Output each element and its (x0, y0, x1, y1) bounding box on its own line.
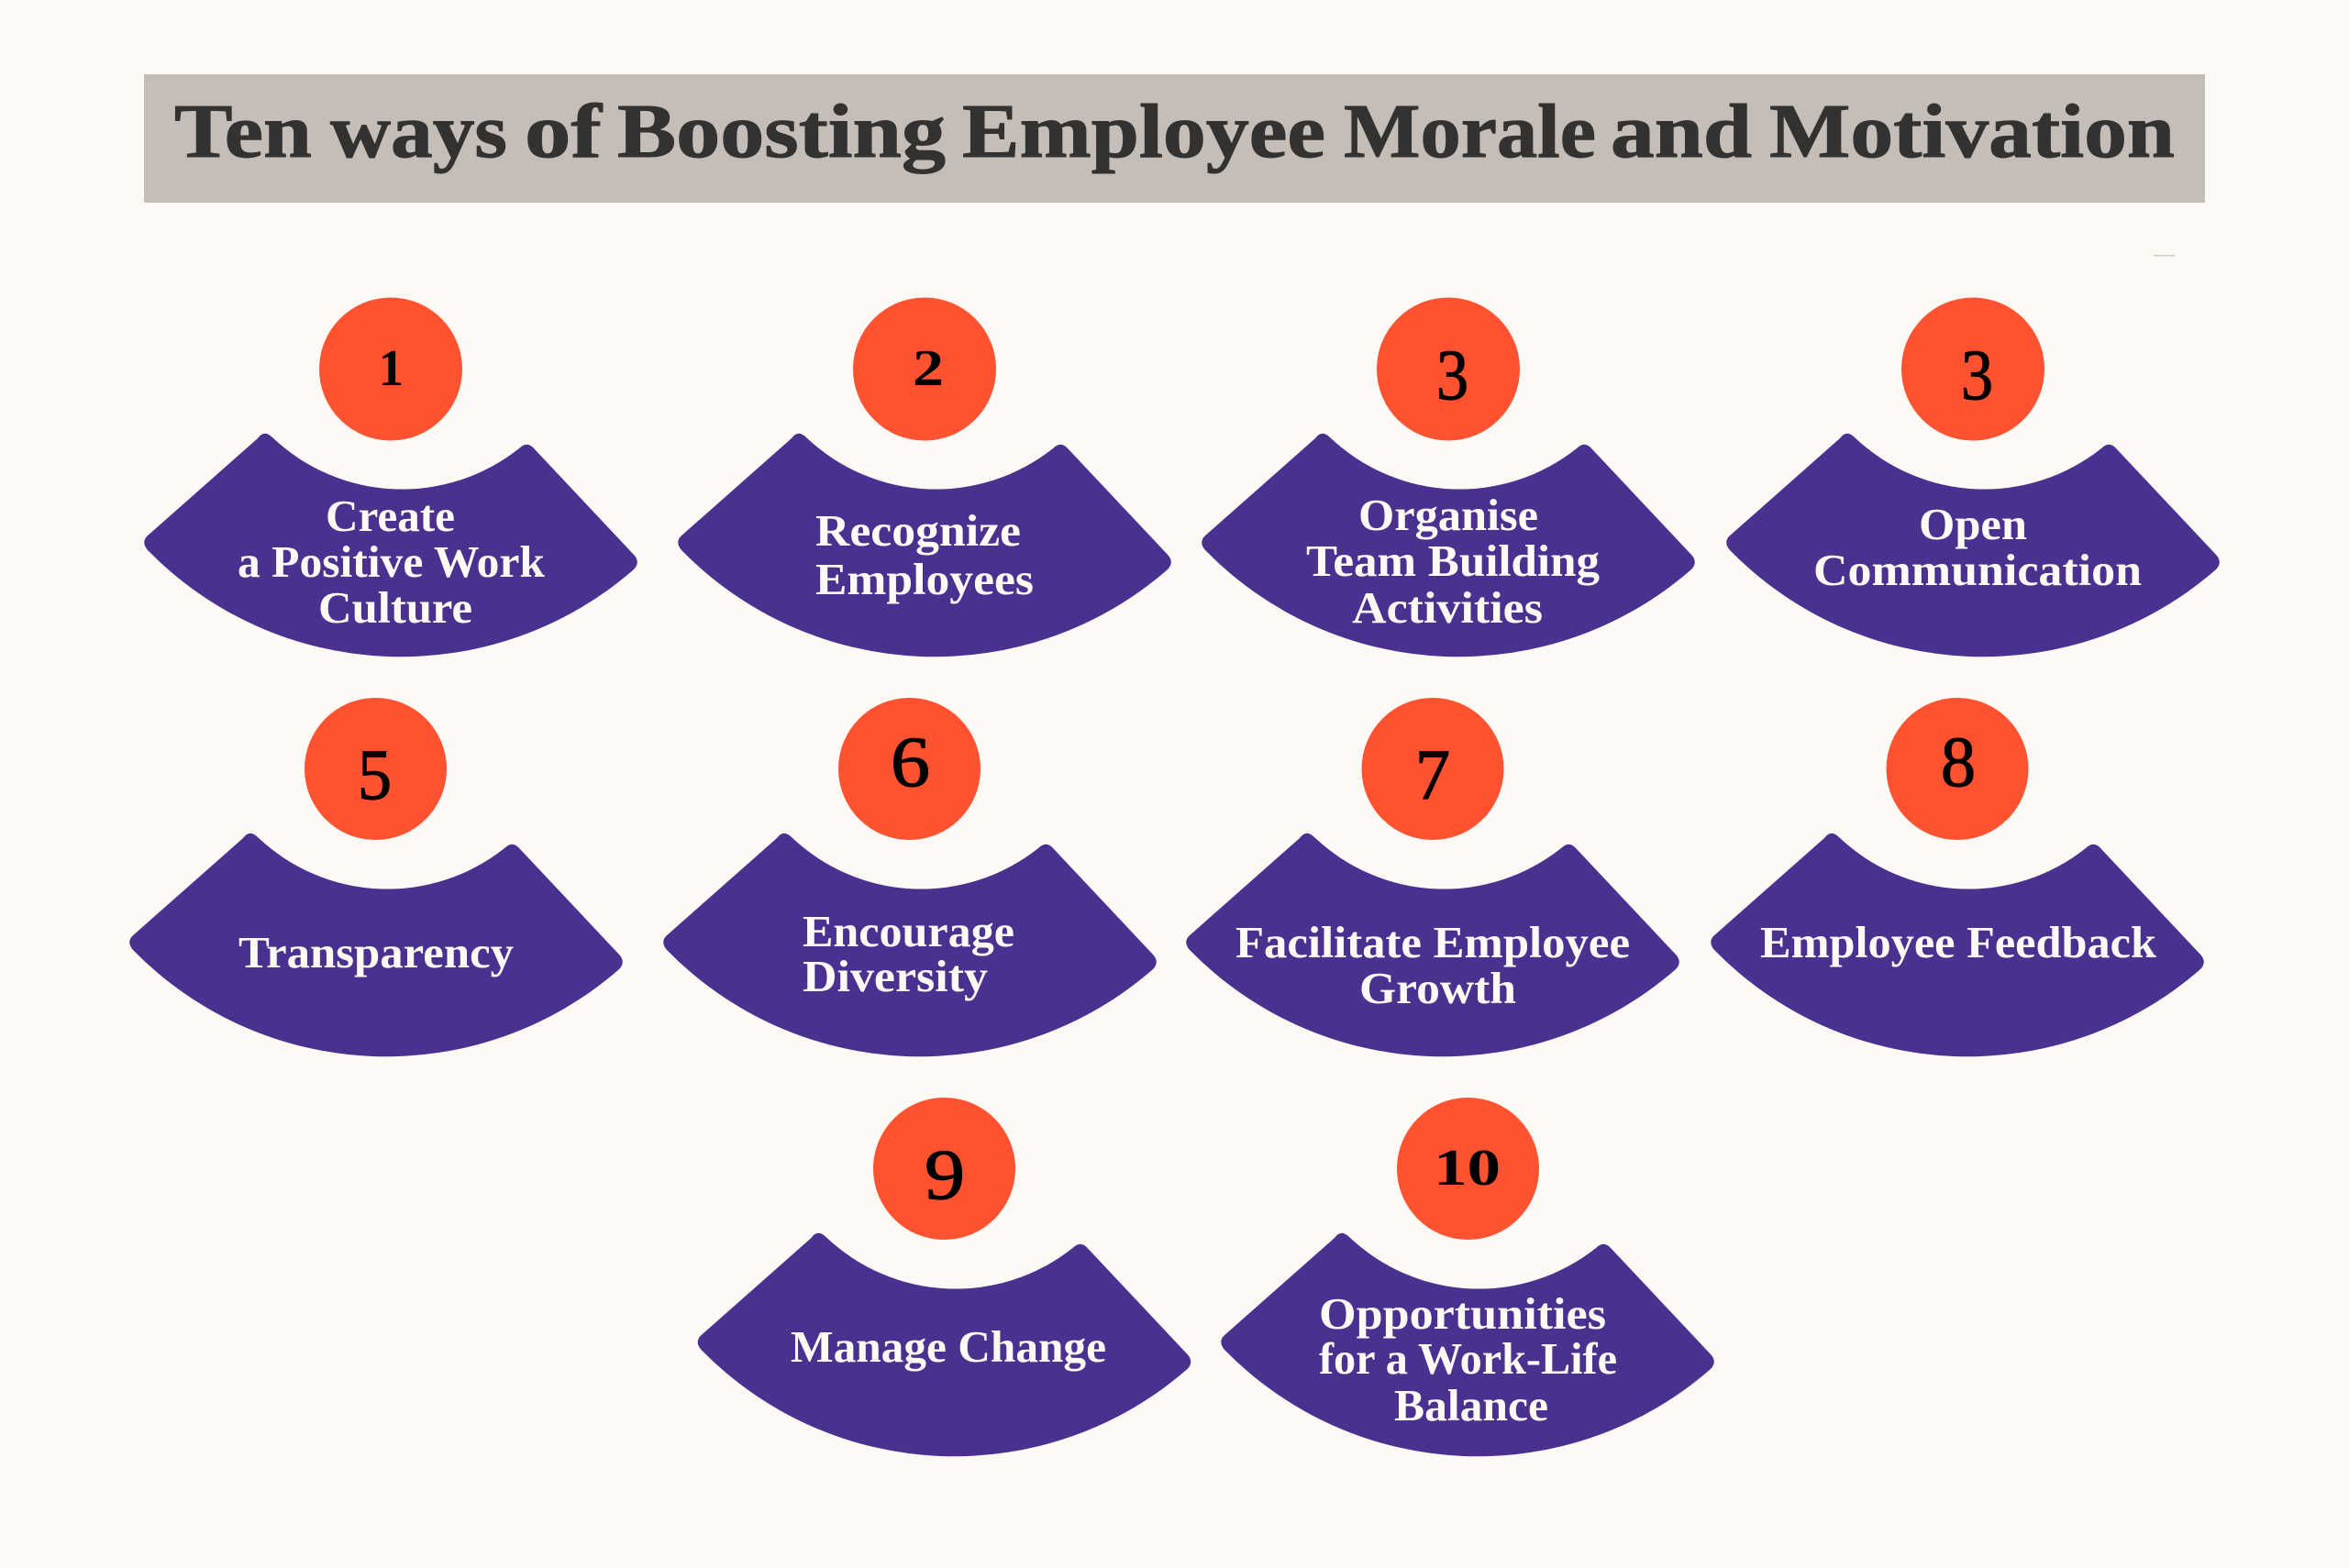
card 6: Encourage Diversity (663, 698, 1157, 1056)
label 3: Activities (1352, 582, 1543, 633)
number circle 7: 7 (1415, 734, 1450, 814)
blade 5 (129, 834, 623, 1056)
label 2: Recognize (815, 505, 1021, 556)
label 2: Employees (815, 554, 1034, 604)
label 2 (815, 505, 1034, 604)
title: Morale (1344, 89, 1596, 174)
label 1: Culture (318, 582, 472, 633)
label 6: Encourage (803, 906, 1014, 956)
label 3: Organise (1358, 490, 1538, 540)
blade 4 (1726, 434, 2220, 657)
label 7: Facilitate Employee (1235, 917, 1630, 967)
number circle 1: 1 (379, 340, 404, 397)
number circle 10 (1397, 1098, 1539, 1240)
label 5: Transparency (238, 927, 515, 977)
number circle 8: 8 (1941, 722, 1976, 801)
label 10: for a Work-Life (1319, 1333, 1617, 1384)
blade 8 (1711, 834, 2204, 1056)
label 10: Opportunities (1319, 1288, 1606, 1339)
number circle 2 (853, 297, 996, 440)
number circle 5 (305, 698, 447, 840)
label 1: a Positive Work (238, 536, 546, 587)
number circle 4: 3 (1961, 335, 1993, 414)
title (174, 89, 2175, 174)
number circle 10: 10 (1434, 1140, 1501, 1197)
title banner (144, 74, 2205, 203)
card 4: Open Communication (1726, 297, 2220, 657)
number circle 7 (1361, 698, 1504, 840)
label 1 (238, 491, 546, 633)
blade 2 (678, 434, 1171, 657)
label 4: Communication (1813, 545, 2142, 595)
card 9: Manage Change (698, 1098, 1191, 1456)
label 4: Open (1919, 499, 2027, 549)
card 2: Recognize Employees (678, 297, 1171, 657)
label 3 (1306, 490, 1601, 633)
number circle 6: 6 (891, 722, 930, 801)
title: ways (330, 89, 507, 174)
blade 10 (1221, 1233, 1714, 1456)
card 5: Transparency (129, 698, 623, 1056)
card 7: Facilitate Employee Growth (1186, 698, 1679, 1056)
number circle 6 (838, 698, 981, 840)
label 6 (803, 906, 1014, 1001)
title: Boosting (617, 89, 946, 174)
title: of (525, 89, 603, 174)
label 6: Diversity (803, 951, 989, 1001)
blade 7 (1186, 834, 1679, 1056)
number circle 2: 2 (913, 340, 944, 397)
number circle 8 (1886, 698, 2029, 840)
label 4 (1813, 499, 2142, 595)
label 7: Growth (1359, 963, 1516, 1013)
label 10: Balance (1394, 1380, 1548, 1430)
card 1: Create a Positive Work Culture (144, 297, 637, 657)
label 9: Manage Change (791, 1321, 1106, 1372)
blade 3 (1202, 434, 1695, 657)
title: Motivation (1769, 89, 2175, 174)
title: Employee (962, 89, 1325, 174)
number circle 4 (1901, 297, 2044, 440)
number circle 1 (319, 297, 462, 440)
label 1: Create (326, 491, 455, 541)
number circle 9 (873, 1098, 1015, 1240)
number circle 5: 5 (358, 734, 392, 814)
card 8: Employee Feedback (1711, 698, 2204, 1056)
number circle 3 (1377, 297, 1520, 440)
blade 1 (144, 434, 637, 657)
card 3: Organise Team Building Activities (1202, 297, 1695, 657)
card 10: Opportunities for a Work-Life Balance (1221, 1098, 1714, 1456)
blade 9 (698, 1233, 1191, 1456)
label 3: Team Building (1306, 536, 1601, 586)
number circle 3: 3 (1436, 335, 1468, 414)
title: and (1611, 89, 1752, 174)
label 10 (1319, 1288, 1617, 1430)
label 8: Employee Feedback (1760, 917, 2157, 967)
label 7 (1235, 917, 1630, 1013)
title: Ten (174, 89, 312, 174)
number circle 9: 9 (925, 1134, 965, 1214)
blade 6 (663, 834, 1157, 1056)
